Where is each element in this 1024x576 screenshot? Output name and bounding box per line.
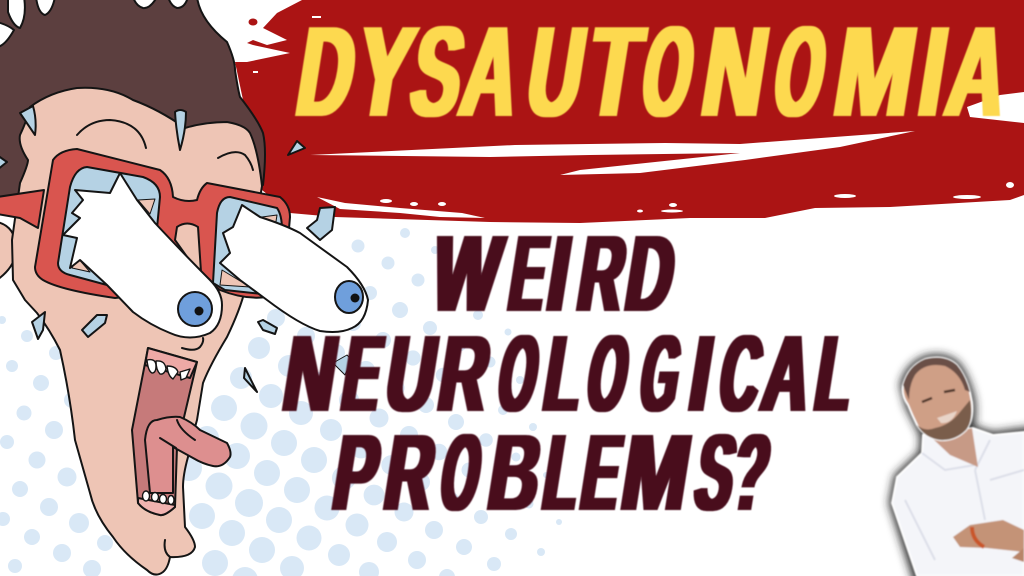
skin slivers inside lenses	[72, 199, 277, 287]
headline line: WEIRD: E	[502, 214, 555, 335]
title: DYSAUTONOMIA: I	[911, 0, 957, 144]
headline line: PROBLEMS?: E	[574, 413, 629, 534]
face and chin	[12, 88, 262, 575]
left popping eye	[63, 173, 222, 338]
presenter portrait	[892, 357, 1024, 576]
headline line: NEUROLOGICAL: R	[432, 314, 498, 435]
headline line: NEUROLOGICAL: C	[712, 314, 769, 435]
title: DYSAUTONOMIA: M	[826, 0, 926, 144]
red glasses frame	[35, 149, 290, 298]
red brush stroke banner	[235, 0, 1024, 223]
headline line: PROBLEMS?: P	[326, 413, 387, 534]
headline line: WEIRD: I	[540, 214, 578, 335]
headline line: NEUROLOGICAL: N	[276, 314, 345, 435]
red splatter drop	[248, 18, 258, 26]
title: DYSAUTONOMIA: O	[634, 0, 704, 144]
title: DYSAUTONOMIA: Y	[347, 0, 424, 144]
folded forearm	[953, 520, 1024, 552]
right popping eye	[220, 205, 368, 332]
headline line: NEUROLOGICAL: O	[580, 314, 636, 435]
upper gum	[145, 348, 197, 378]
right iris	[335, 281, 363, 313]
headline line: PROBLEMS?: ?	[725, 413, 777, 534]
head	[903, 357, 972, 440]
cartoon shocked face illustration	[0, 0, 368, 575]
soft photo body	[892, 357, 1024, 576]
headline line: NEUROLOGICAL: A	[755, 314, 819, 435]
left iris	[178, 292, 212, 326]
white brush streak	[310, 131, 915, 175]
glasses arm	[0, 190, 44, 228]
eyes	[922, 390, 955, 402]
headline line: NEUROLOGICAL: L	[537, 314, 591, 435]
headline line: PROBLEMS?	[326, 413, 777, 534]
orange bracelet	[972, 527, 984, 547]
sweat drips at hair top	[0, 0, 188, 47]
headline line: PROBLEMS?: O	[434, 413, 489, 534]
headline line: WEIRD: D	[619, 214, 683, 335]
white shirt	[892, 428, 1024, 576]
headline line: NEUROLOGICAL: G	[633, 314, 688, 435]
hair	[0, 0, 265, 200]
title: DYSAUTONOMIA: T	[579, 0, 652, 144]
smile	[937, 411, 957, 423]
headline line: NEUROLOGICAL: U	[379, 314, 445, 435]
headline line: NEUROLOGICAL: I	[682, 314, 720, 435]
title: DYSAUTONOMIA: U	[519, 0, 595, 144]
skin showing between lenses	[175, 224, 201, 272]
beard	[917, 400, 971, 440]
balding hair rim	[903, 357, 970, 400]
shirt folds	[905, 440, 1024, 560]
headline line: PROBLEMS?: R	[378, 413, 443, 534]
lower white sliver and flecks	[253, 16, 1014, 218]
tongue crease	[160, 420, 195, 448]
lower gum	[138, 498, 175, 515]
ear	[0, 222, 16, 280]
headline line: NEUROLOGICAL: L	[808, 314, 861, 435]
upper teeth	[147, 360, 190, 380]
headline line: PROBLEMS?: B	[481, 413, 549, 534]
headline line: PROBLEMS?: L	[536, 413, 588, 534]
flying glass shards	[0, 106, 352, 392]
right pupil	[350, 294, 360, 302]
open mouth	[132, 348, 197, 515]
halftone dot background	[0, 228, 562, 576]
title: DYSAUTONOMIA: N	[694, 0, 778, 144]
left lens	[58, 167, 160, 285]
headline line: WEIRD: W	[424, 214, 510, 335]
headline line: NEUROLOGICAL	[276, 314, 861, 435]
title: DYSAUTONOMIA: S	[403, 0, 474, 144]
title: DYSAUTONOMIA	[289, 0, 1018, 144]
headline line: PROBLEMS?: M	[614, 413, 698, 534]
eyebrows	[77, 120, 253, 170]
headline line: PROBLEMS?: S	[688, 413, 743, 534]
title: DYSAUTONOMIA: D	[289, 0, 366, 144]
neck	[932, 428, 978, 467]
headline line: WEIRD: R	[571, 214, 634, 335]
headline line: WEIRD	[424, 214, 683, 335]
title: DYSAUTONOMIA: A	[453, 0, 530, 144]
headline line: NEUROLOGICAL: O	[491, 314, 546, 435]
tongue	[145, 417, 231, 493]
left pupil	[194, 306, 204, 316]
headline line: NEUROLOGICAL: E	[335, 314, 390, 435]
title: DYSAUTONOMIA: O	[766, 0, 836, 144]
lower teeth	[142, 491, 174, 504]
portrait shadow	[892, 357, 1024, 576]
lower arm	[1012, 548, 1024, 562]
right lens	[213, 197, 282, 294]
chin crease and nose line	[165, 338, 203, 557]
